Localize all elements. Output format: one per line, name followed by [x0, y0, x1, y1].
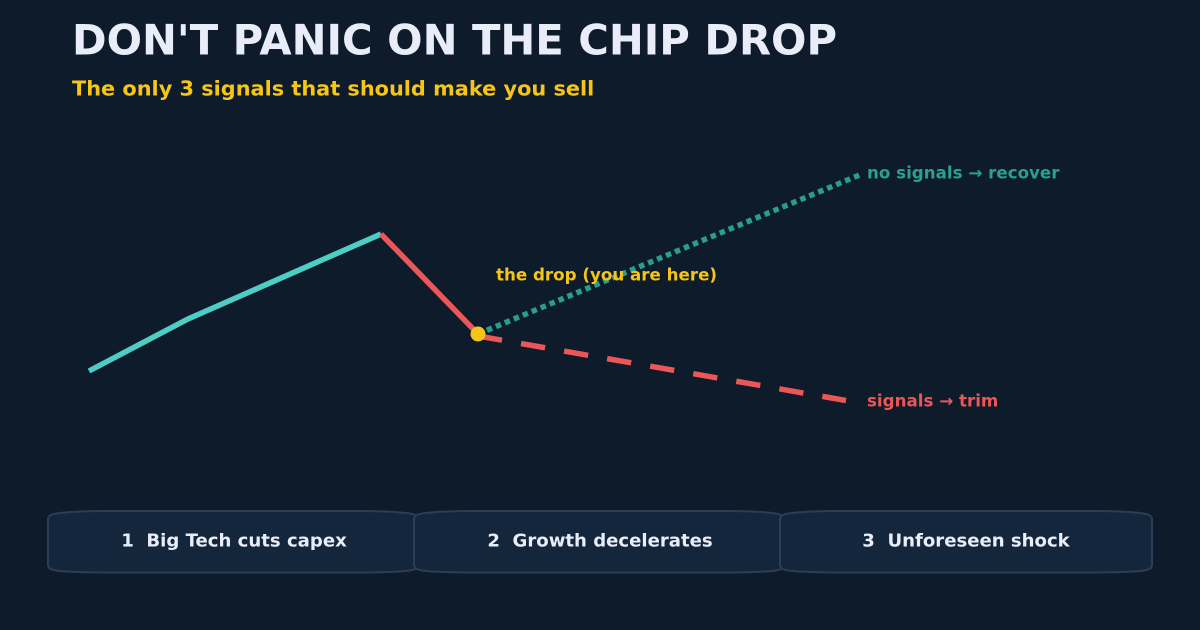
title: DON'T PANIC ON THE CHIP DROP [72, 16, 837, 64]
signal card 3: 3 Unforeseen shock [862, 530, 1071, 552]
label: the drop: the drop (you are here) [496, 264, 717, 284]
signal card 3 [780, 511, 1152, 572]
rising price line [89, 234, 381, 371]
signal card 2: 2 Growth decelerates [487, 530, 713, 552]
recovery scenario dotted line [478, 175, 860, 334]
signal card 1 [48, 511, 418, 572]
label: no signals recover: no signals → recover [867, 162, 1060, 182]
line chart: price path and scenarios [89, 175, 860, 400]
current point marker [470, 326, 486, 342]
drop segment [381, 234, 478, 334]
signal card 1: 1 Big Tech cuts capex [121, 530, 347, 552]
signal card 2 [414, 511, 784, 572]
label: signals trim: signals → trim [867, 390, 998, 410]
trim scenario dashed line [478, 336, 846, 400]
subtitle: The only 3 signals that should make you sell [72, 76, 594, 100]
